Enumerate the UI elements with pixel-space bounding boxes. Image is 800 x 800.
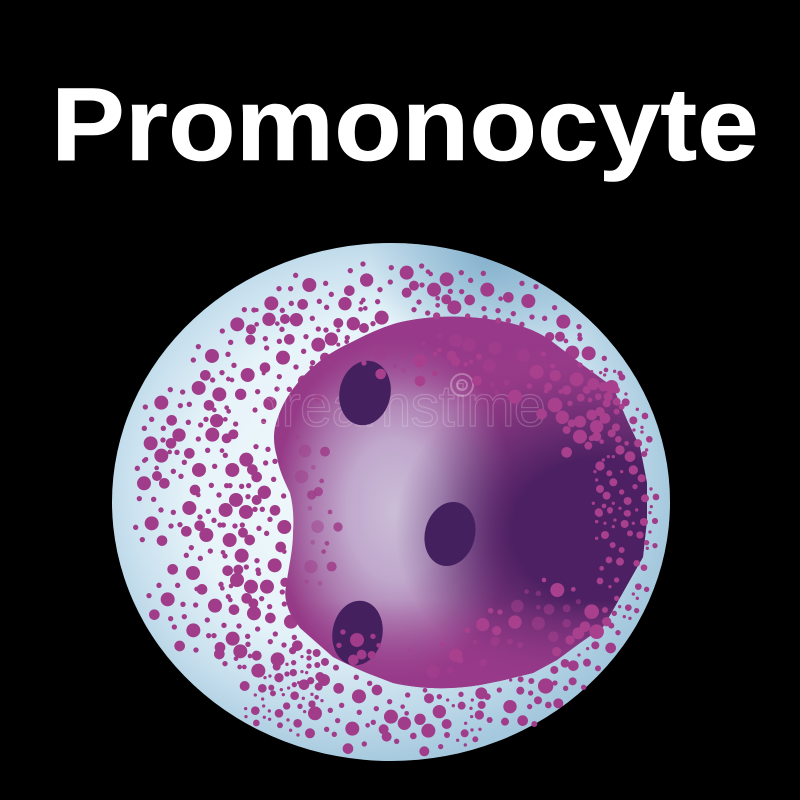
nuclear granules: faded, left and top [295,345,397,586]
cytoplasm granules: upper right [400,263,659,524]
nucleolus: middle [417,496,483,572]
nuclear granules: upper and right [401,312,649,528]
cell [112,243,670,761]
watermark: dreamstime [250,374,546,439]
nucleolus: top [333,356,397,430]
cytoplasm [112,243,670,761]
watermark spiral [451,374,473,396]
nuclear granules: lower [408,507,649,678]
cytoplasm granules: lower left [133,516,399,754]
nucleolus: bottom [327,597,388,669]
title: Promonocyte [51,66,759,182]
nucleus body [274,317,647,688]
cytoplasm granules: upper left [135,261,394,520]
cytoplasm granules: lower right [398,518,658,756]
nucleus [250,312,649,688]
nuclear granules: solid, left [307,447,343,572]
